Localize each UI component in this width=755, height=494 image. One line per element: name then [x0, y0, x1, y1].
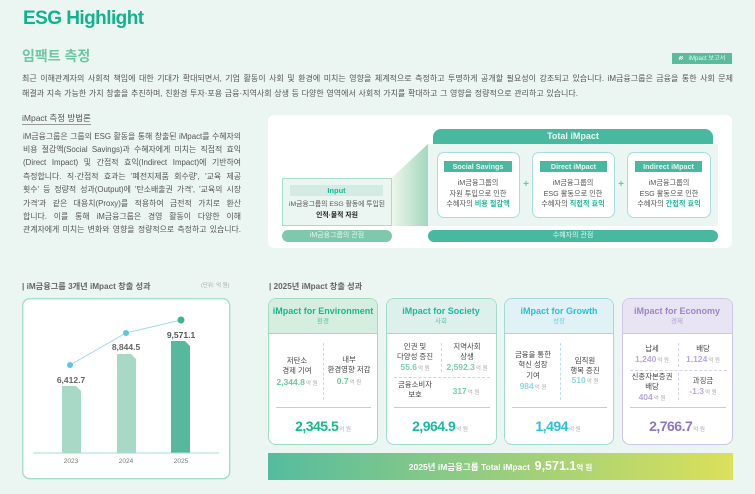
bar chart: [22, 298, 230, 480]
item: dividends: 1,124억 원: [686, 354, 720, 364]
society header: [387, 299, 496, 334]
input description: iM금융그룹의 ESG 활동에 투입된: [289, 201, 385, 208]
item: community: [446, 342, 488, 372]
item: financial consumer protection: 금융소비자: [398, 380, 432, 389]
input label: [290, 185, 383, 196]
item: low carbon economy: 2,344.8억 원: [276, 377, 318, 387]
method paragraph: 비용 절감액(Social Savings)과 수혜자에게 미치는 직접적 효익: [23, 145, 241, 154]
item: human rights and diversity: 다양성 증진: [397, 352, 433, 360]
item: dividends: 배당: [696, 344, 710, 353]
text: indirect impact: ESG 활동으로 인한: [640, 188, 698, 198]
item: dividends: [686, 344, 720, 364]
value labels: [57, 330, 195, 385]
economy header: iMpact for Economy: [634, 306, 720, 316]
growth header: 성장: [553, 318, 565, 325]
panel: economy: [623, 299, 732, 444]
item: innovative growth: 금융을 통한: [515, 350, 551, 359]
item: employee wellbeing: 510억 원: [572, 375, 598, 385]
item: hybrid securities dividend: 배당: [645, 382, 659, 391]
method paragraph: (Direct Impact) 및 간접적 효익(Indirect Impact)에 기반하여: [23, 158, 241, 167]
bar 2025: [171, 341, 190, 453]
intro text: 해결과 지속 가능한 가치 창출을 추진하며, 친환경 투자·포용 금융·지역사회 상생 등 다양한 영역에서 사회적 가치를 확대하고 그 영향을 정량적으로 관리하고 있습니다.: [22, 89, 578, 98]
text: social savings: iM금융그룹의: [458, 178, 498, 187]
label: social savings: Social Savings: [453, 162, 503, 171]
environment header: [269, 299, 377, 334]
item: internal environmental impact reduction: 내부: [342, 355, 356, 364]
item: hybrid securities dividend: 404억 원: [639, 392, 665, 402]
item: employee wellbeing: 행복 증진: [570, 366, 600, 375]
item: innovative growth: 혁신 성장: [518, 360, 548, 369]
year labels: 2025: [174, 458, 189, 465]
trend line: [67, 316, 184, 368]
item: community: 2,592.3억 원: [446, 362, 488, 372]
text: social savings: [446, 178, 510, 208]
item: low carbon economy: 저탄소: [287, 356, 307, 365]
total impact body: [428, 144, 718, 226]
item: internal environmental impact reduction: 환경영향 저감: [328, 365, 370, 374]
plus sign: +: [618, 179, 624, 190]
pill: group perspective: [282, 230, 392, 242]
item: financial consumer protection: 보호: [408, 390, 422, 398]
value labels: 6,412.7: [57, 375, 85, 385]
value: financial consumer protection: 317억 원: [453, 386, 479, 396]
pill: beneficiary perspective: [428, 230, 718, 242]
unit note: (단위: 억 원): [201, 283, 230, 289]
section heading: impact measurement: 임팩트 측정: [22, 48, 90, 64]
item: human rights and diversity: 인권 및: [404, 342, 426, 351]
panel: society: [387, 299, 496, 444]
input description: 인적·물적 자원: [316, 212, 358, 219]
card: direct impact: [532, 152, 615, 218]
bar 2023: [62, 386, 81, 453]
society header: iMpact for Society: [402, 306, 480, 316]
economy header: [623, 299, 732, 334]
text: direct impact: iM금융그룹의: [553, 178, 593, 187]
value labels: 9,571.1: [167, 330, 195, 340]
item: human rights and diversity: 55.6억 원: [400, 362, 430, 372]
economy header: 경제: [671, 318, 683, 325]
label: direct impact: [540, 161, 607, 172]
text: indirect impact: iM금융그룹의: [649, 178, 689, 187]
title: ESG Highlight: [23, 8, 144, 29]
pill: group perspective: iM금융그룹의 관점: [310, 232, 364, 239]
text: social savings: 자원 투입으로 인한: [450, 188, 506, 198]
item: internal environmental impact reduction: 0.7억 원: [337, 376, 361, 386]
panel: impact framework: [268, 115, 732, 248]
card: social savings: [437, 152, 520, 218]
label: direct impact: Direct iMpact: [551, 162, 596, 171]
bar 2024: [117, 354, 136, 453]
society header: 사회: [435, 318, 447, 325]
panel: growth: [505, 299, 613, 444]
text: social savings: 수혜자의 비용 절감액: [446, 199, 510, 208]
total impact header: [433, 129, 713, 144]
growth header: iMpact for Growth: [520, 306, 598, 316]
button: iMpact report: [672, 53, 732, 64]
item: hybrid securities dividend: 신종자본증권: [632, 372, 672, 381]
label: social savings: [444, 161, 512, 172]
input box: [282, 178, 392, 226]
item: community: 지역사회: [453, 342, 481, 351]
label: indirect impact: [635, 161, 702, 172]
item: low carbon economy: [276, 356, 318, 387]
text: indirect impact: 수혜자의 간접적 효익: [637, 199, 701, 208]
item: tax: 납세: [645, 344, 659, 353]
growth header: [505, 299, 613, 334]
total banner: 2025년 iM금융그룹 Total iMpact 9,571.1억 원: [409, 459, 592, 473]
method paragraph: iM금융그룹은 그룹의 ESG 활동을 통해 창출된 iMpact를 수혜자의: [23, 132, 241, 140]
text: direct impact: 수혜자의 직접적 효익: [541, 199, 605, 208]
input description: [289, 200, 385, 219]
card: indirect impact: [627, 152, 711, 218]
society total: 2,964.9억 원: [412, 418, 468, 434]
method paragraph: 합니다. 이를 통해 iM금융그룹은 경영 활동이 다양한 이해: [23, 212, 241, 221]
method paragraph: 가격'과 같은 대용치(Proxy)를 적용하여 금전적 가치로 환산: [23, 198, 241, 208]
item: innovative growth: 984억 원: [520, 381, 546, 391]
text: indirect impact: [637, 178, 701, 208]
value labels: 8,844.5: [112, 342, 140, 352]
method paragraph: 횟수' 등 정량적 성과(Output)에 '탄소배출권 가격', '교육의 시장: [23, 185, 241, 194]
total banner: [268, 453, 733, 480]
pill: beneficiary perspective: 수혜자의 관점: [553, 232, 593, 239]
method paragraph: [23, 132, 241, 234]
text: direct impact: [541, 178, 605, 208]
item: internal environmental impact reduction: [328, 355, 370, 386]
method paragraph: 관계자에게 미치는 변화와 영향을 정량적으로 측정하고 있습니다.: [23, 225, 241, 234]
item: employee wellbeing: [570, 356, 600, 385]
environment header: iMpact for Environment: [273, 306, 373, 316]
item: penalties: 과징금: [693, 376, 713, 385]
year labels: [64, 458, 189, 465]
input label: Input: [327, 186, 346, 195]
environment total: 2,345.5억 원: [295, 418, 351, 434]
item: financial consumer protection: [398, 380, 432, 398]
economy total: 2,766.7억 원: [649, 418, 705, 434]
item: tax: 1,240억 원: [635, 354, 669, 364]
method paragraph: 측정합니다. 직·간접적 효과는 '폐전지제품 회수량', '교육 제공: [23, 172, 241, 181]
item: human rights and diversity: [397, 342, 433, 372]
heading: 2025 performance: | 2025년 iMpact 창출 성과: [269, 282, 362, 291]
environment header: 환경: [317, 318, 329, 325]
intro text: 최근 이해관계자의 사회적 책임에 대한 기대가 확대되면서, 기업 활동이 사회 및 환경에 미치는 영향을 체계적으로 측정하고 투명하게 공개할 필요성이 강조되고 있습니다. iM금융그룹은 금융을 통한 사회 문제: [22, 74, 733, 83]
text: direct impact: ESG 활동으로 인한: [544, 188, 602, 198]
panel: environment: [269, 299, 377, 444]
method heading: iMpact 측정 방법론: [22, 113, 91, 123]
growth total: 1,494억 원: [535, 418, 581, 434]
item: low carbon economy: 경제 기여: [282, 366, 312, 375]
total impact header: Total iMpact: [547, 131, 599, 141]
item: employee wellbeing: 임직원: [575, 356, 595, 365]
connector: input to total: [392, 144, 428, 226]
intro text: [22, 74, 733, 98]
label: indirect impact: Indirect iMpact: [643, 162, 694, 171]
button: iMpact report: iMpact 보고서: [688, 55, 726, 62]
item: innovative growth: 기여: [526, 371, 540, 380]
item: penalties: -1.3억 원: [689, 386, 717, 396]
item: tax: [635, 344, 669, 364]
item: penalties: [689, 376, 717, 396]
year labels: 2023: [64, 458, 79, 465]
plus sign: +: [523, 179, 529, 190]
heading: three year performance: | iM금융그룹 3개년 iMpact 창출 성과: [22, 282, 151, 291]
year labels: 2024: [119, 458, 134, 465]
item: community: 상생: [460, 352, 474, 360]
item: innovative growth: [515, 350, 551, 391]
item: hybrid securities dividend: [632, 372, 672, 402]
